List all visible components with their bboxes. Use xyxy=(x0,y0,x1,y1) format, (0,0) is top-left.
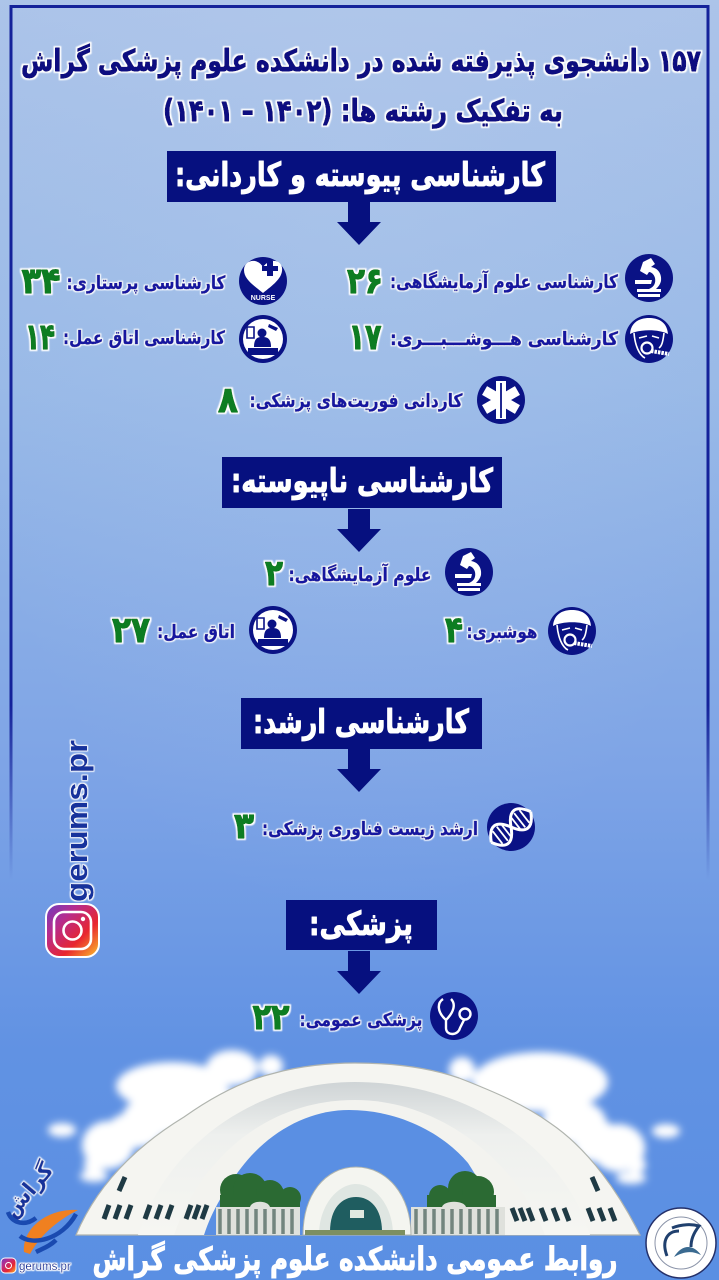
panel: non-continuous bachelor xyxy=(112,457,596,655)
item: operating room: اتاق عمل: xyxy=(157,622,235,643)
item: laboratory sciences xyxy=(347,254,673,302)
arch window slits xyxy=(104,1177,615,1221)
arrow xyxy=(337,749,381,792)
heading: master's: کارشناسی ارشد: xyxy=(253,702,470,741)
item: general medicine: ۲۲ xyxy=(252,997,290,1038)
small handle: gerums.pr xyxy=(19,1261,71,1273)
panel: continuous bachelor and associate xyxy=(22,151,673,424)
icon: DNA xyxy=(484,803,538,851)
item: anesthesia: ۴ xyxy=(445,610,463,651)
item: laboratory sciences: علوم آزمایشگاهی: xyxy=(288,563,432,586)
heading: continuous bachelor and associate xyxy=(167,151,556,202)
instagram handle xyxy=(46,740,99,957)
item: laboratory sciences: ۲ xyxy=(265,553,283,594)
arrow xyxy=(337,951,381,994)
item: medical biotechnology: ۳ xyxy=(234,806,254,847)
heading: medicine: پزشکی: xyxy=(309,904,413,944)
title xyxy=(21,43,701,129)
item: operating room xyxy=(25,315,287,363)
arch opening xyxy=(204,1110,505,1235)
item: laboratory sciences: کارشناسی علوم آزمایشگاهی: xyxy=(390,270,618,293)
item: medical biotechnology: ارشد زیست فناوری پزشکی: xyxy=(262,819,478,840)
icon: stethoscope xyxy=(430,992,478,1040)
icon: instagram xyxy=(46,904,99,957)
item: operating room xyxy=(112,606,297,654)
small gate xyxy=(303,1167,411,1235)
item: medical emergencies: کاردانی فوریت‌های پزشکی: xyxy=(250,391,463,412)
heading: continuous bachelor and associate: کارشناسی پیوسته و کاردانی: xyxy=(175,155,546,195)
handle text: gerums.pr xyxy=(59,740,94,902)
item: anesthesia: کارشناسی هـــوشـــبـــری: xyxy=(390,329,618,350)
icon: nurse heart: NURSE xyxy=(251,295,276,302)
panel: master's xyxy=(234,698,538,851)
panel: medicine xyxy=(252,900,478,1040)
logo: news agency xyxy=(0,1157,78,1273)
item: anesthesia xyxy=(445,607,596,655)
logo calligraphy: گراش xyxy=(0,1157,59,1224)
item: laboratory sciences: ۲۶ xyxy=(347,261,383,302)
fences xyxy=(216,1202,505,1235)
trees xyxy=(220,1171,496,1209)
small instagram icon xyxy=(1,1258,16,1273)
item: general medicine xyxy=(252,992,478,1040)
item: general medicine: پزشکی عمومی: xyxy=(300,1010,422,1031)
heading: non-continuous bachelor xyxy=(222,457,502,508)
item: nursing: کارشناسی پرستاری: xyxy=(66,273,226,294)
icon: star of life xyxy=(477,376,525,424)
title: به تفکیک رشته ها: (۱۴۰۲ – ۱۴۰۱) xyxy=(163,94,563,129)
item: medical emergencies xyxy=(218,376,525,424)
heading: master's xyxy=(241,698,482,749)
item: operating room: ۲۷ xyxy=(112,610,150,651)
item: laboratory sciences xyxy=(265,548,493,596)
item: anesthesia: هوشبری: xyxy=(466,622,538,643)
decorative frame xyxy=(11,6,708,880)
item: operating room: ۱۴ xyxy=(25,317,55,358)
heading: medicine xyxy=(286,900,437,950)
item: nursing: ۳۴ xyxy=(22,261,60,302)
item: medical emergencies: ۸ xyxy=(218,380,238,421)
clouds xyxy=(48,1050,680,1184)
campus gate arch xyxy=(76,1063,640,1235)
logo: university emblem xyxy=(646,1208,716,1278)
logo swoosh xyxy=(8,1210,78,1254)
arrow xyxy=(337,509,381,552)
item: medical biotechnology xyxy=(234,803,538,851)
heading: non-continuous bachelor: کارشناسی ناپیوسته: xyxy=(231,461,494,501)
item: operating room: کارشناسی اتاق عمل: xyxy=(63,328,225,349)
item: anesthesia xyxy=(348,315,673,363)
icon: nurse heart xyxy=(239,257,287,305)
item: nursing xyxy=(22,257,287,305)
item: anesthesia: ۱۷ xyxy=(348,317,382,358)
arch xyxy=(76,1063,640,1235)
arrow xyxy=(337,202,381,245)
